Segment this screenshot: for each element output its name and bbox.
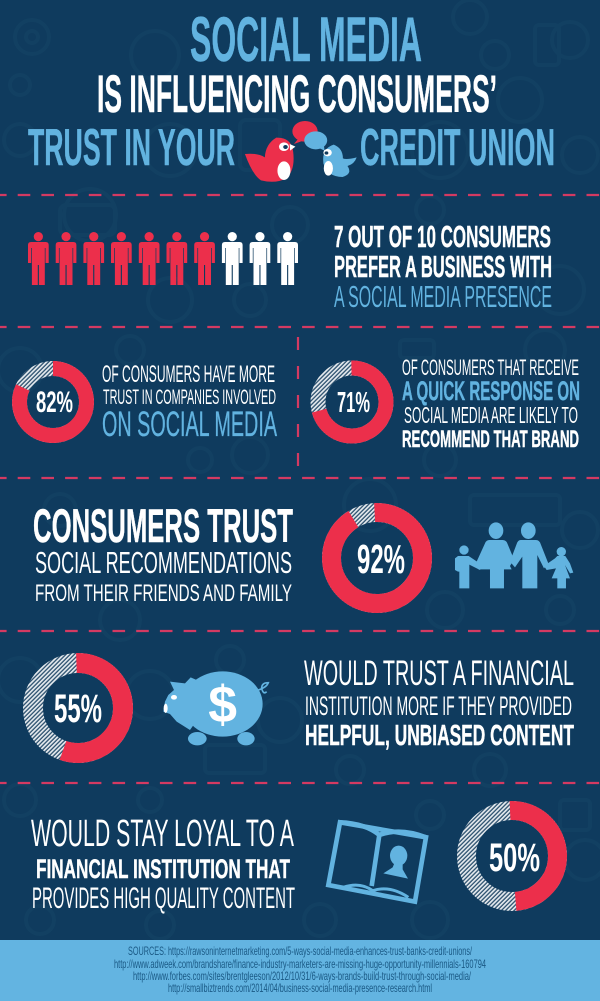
panel: 92 percent [33, 499, 573, 607]
icon: blue bird [323, 145, 357, 177]
donut chart 55% [31, 661, 125, 755]
text block: TRUST IN COMPANIES INVOLVED [103, 386, 276, 409]
title [28, 5, 555, 177]
panel: 71 percent [317, 355, 580, 453]
panel: 50 percent [31, 809, 559, 915]
sources text: http://smallbiztrends.com/2014/04/business-social-media-presence-research.html [168, 981, 432, 995]
donut chart 92% [329, 510, 425, 606]
text block [33, 499, 293, 607]
panel: 7 out of 10 [28, 219, 552, 314]
donut chart 50% [465, 809, 559, 903]
text block: WOULD STAY LOYAL TO A [31, 813, 294, 855]
text block: ON SOCIAL MEDIA [102, 405, 277, 444]
icon: red bird [245, 138, 295, 182]
donut chart 82% [20, 368, 86, 436]
panel: 55 percent [31, 654, 574, 755]
icon: piggy bank [163, 671, 268, 745]
panel: 82 percent [20, 361, 277, 444]
title line 3 left: TRUST IN YOUR [28, 119, 235, 177]
text block: OF CONSUMERS HAVE MORE [102, 361, 275, 388]
donut chart 92%: 92% [357, 536, 405, 582]
dashed dividers [0, 195, 600, 783]
text block [334, 219, 552, 314]
donut chart 82%: 82% [36, 386, 73, 419]
text block: CONSUMERS TRUST [33, 499, 293, 552]
donut chart 71%: 71% [337, 387, 370, 419]
donut chart 71% [317, 367, 387, 437]
panel: sources footer [0, 940, 600, 1001]
icon: open book [328, 822, 426, 902]
panel: 50 percent: PROVIDES HIGH QUALITY CONTENT [32, 882, 295, 915]
icon: two talking birds [245, 121, 357, 182]
text block [304, 654, 574, 752]
donut chart 55%: 55% [54, 687, 102, 731]
donut chart 50%: 50% [489, 836, 540, 880]
text block [402, 355, 580, 453]
pictogram: 7 red people [28, 232, 215, 285]
pictogram: 3 white people [222, 232, 298, 285]
icon: blue speech bubble [304, 131, 327, 151]
text block: FROM THEIR FRIENDS AND FAMILY [35, 580, 292, 607]
sources text [114, 944, 486, 995]
text block: SOCIAL RECOMMENDATIONS [35, 545, 292, 580]
icon: red speech bubble [292, 121, 318, 144]
icon: family [455, 522, 573, 588]
text block [31, 813, 295, 915]
text block [102, 361, 277, 444]
text block: FINANCIAL INSTITUTION THAT [36, 854, 290, 884]
icon: piggy bank: $ [208, 675, 237, 733]
